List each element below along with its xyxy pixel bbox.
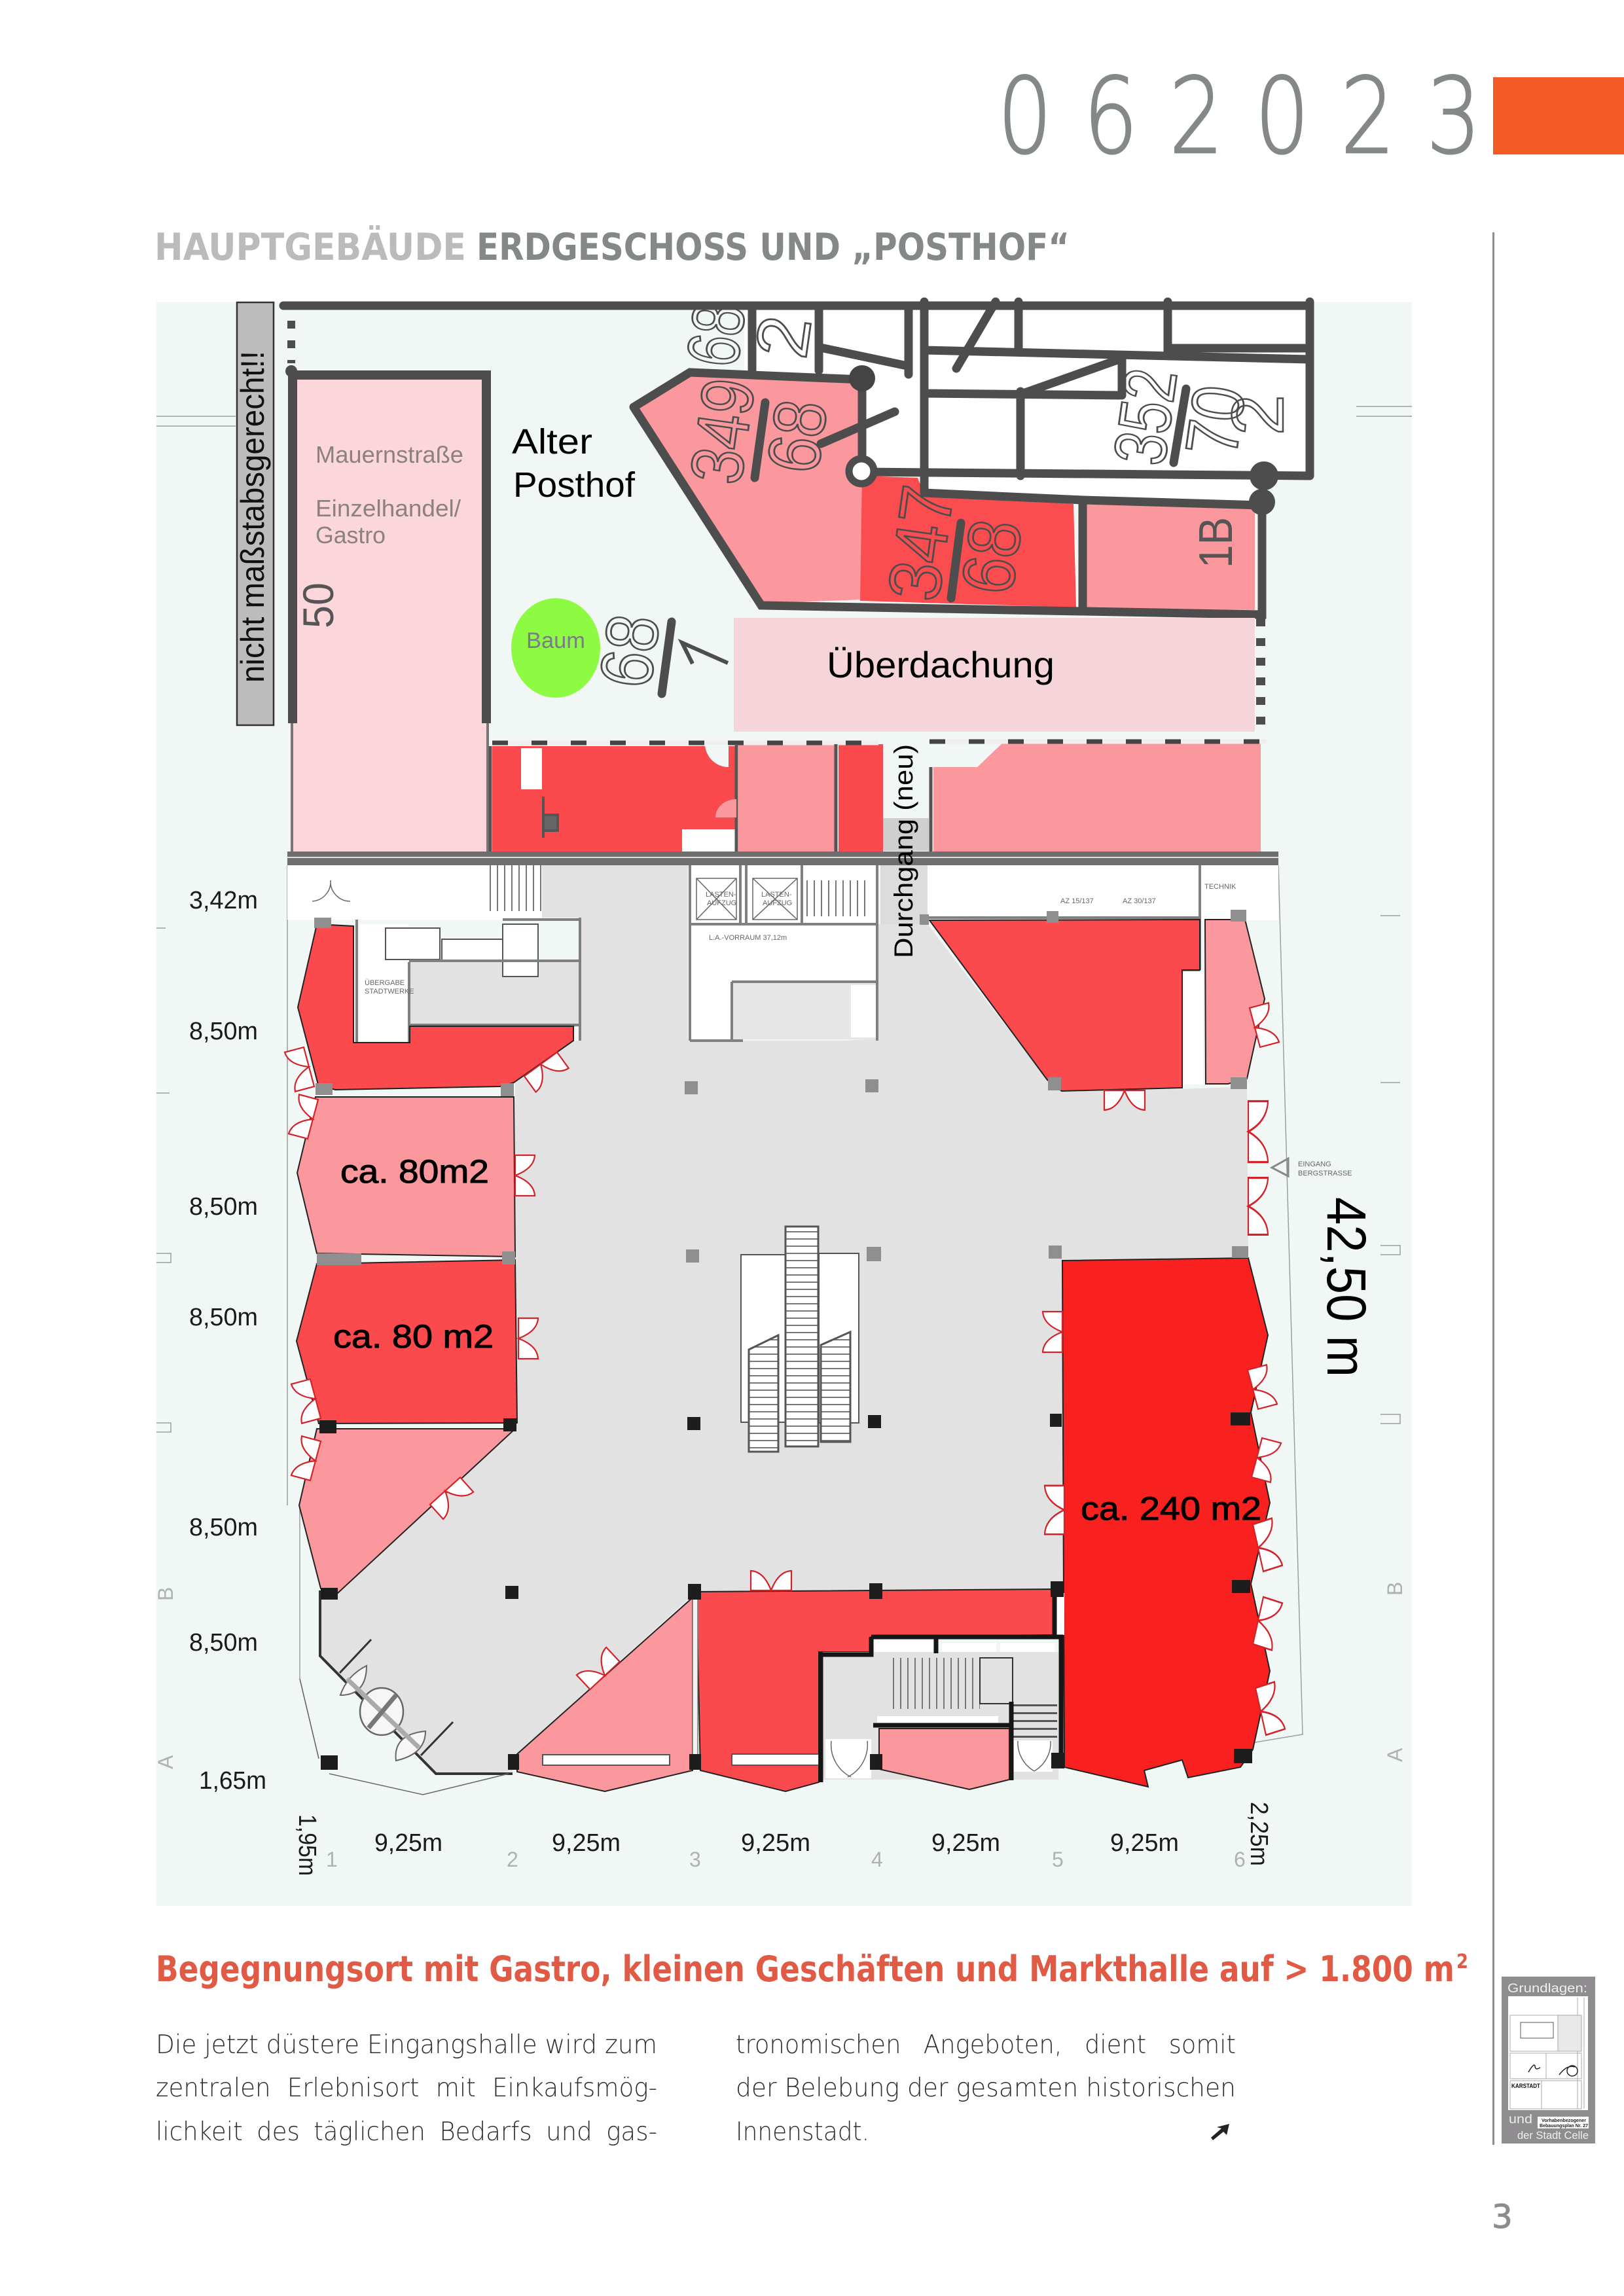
parcel number 1B: 1B — [1190, 517, 1242, 568]
grid marks and axis letters: B — [1383, 1582, 1407, 1596]
grid marks and axis letters: 1 — [326, 1848, 338, 1871]
header: issue number 06 2023: 2 — [1169, 55, 1223, 177]
shop: north-east red — [929, 920, 1200, 1091]
dimensions: left side heights — [189, 887, 266, 1795]
shop: about 80 square metres, red — [297, 1260, 517, 1424]
parcel number 347/68: 68 — [946, 514, 1038, 599]
lift core — [690, 865, 877, 1041]
body text left column: Die jetzt düstere Eingangshalle wird zum — [156, 2030, 657, 2060]
shop: east small pink — [1205, 920, 1265, 1084]
page title: ERDGESCHOSS UND „POSTHOF“ — [477, 226, 1070, 269]
body text right column: tronomischen Angeboten, dient somit — [736, 2030, 1236, 2060]
shop: south-west pink — [299, 1429, 515, 1593]
canopy: Überdachung: Überdachung — [827, 644, 1055, 685]
south stair core — [821, 1593, 1064, 1789]
parcel number 347/68: 347 — [873, 480, 969, 605]
lift core: LASTEN- — [706, 891, 736, 899]
north service corridor: TECHNIK — [1204, 883, 1236, 891]
lift core: L.A.-VORRAUM 37,12m — [709, 934, 787, 942]
page number: 3 — [1492, 2198, 1513, 2236]
dimensions: left side heights: 8,50m — [189, 1193, 258, 1221]
dimensions: left side heights: 8,50m — [189, 1514, 258, 1541]
lift core: AUFZUG — [763, 899, 792, 907]
body text right column: der Belebung der gesamten historischen — [736, 2073, 1236, 2103]
shop: north-west — [298, 924, 573, 1090]
grid marks and axis letters: 2 — [507, 1848, 518, 1871]
south-west entrance with revolving door — [300, 1590, 513, 1795]
shop: about 240 square metres: ca. 240 m2 — [1081, 1490, 1261, 1527]
shop: about 240 square metres — [1062, 1258, 1270, 1787]
cadastre: neighbouring parcels — [283, 298, 1310, 694]
header: issue number 06 2023: 2 — [1341, 55, 1395, 177]
dimensions: bottom widths: 9,25m — [741, 1829, 810, 1857]
dimensions: bottom widths — [293, 1802, 1272, 1876]
label: Alter Posthof: Alter — [512, 422, 592, 461]
grid marks and axis letters: 3 — [689, 1848, 701, 1871]
dimensions: bottom widths: 2,25m — [1245, 1802, 1272, 1866]
dimension: total depth 42,50 m: 42,50 m — [1316, 1197, 1377, 1377]
thumbnail: Grundlagen document: Grundlagen: — [1507, 1982, 1587, 1996]
vertical rule — [1492, 232, 1494, 2145]
main hall floor — [287, 852, 1278, 1774]
north service corridor: AZ 15/137 — [1060, 897, 1094, 905]
heading: meeting place: 2 — [1456, 1950, 1468, 1973]
structural columns — [314, 910, 1252, 1770]
north service corridor: AZ 30/137 — [1123, 897, 1156, 905]
unit: Mauernstrasse retail and gastro — [285, 321, 488, 852]
grid marks and axis letters: 6 — [1234, 1848, 1246, 1871]
grid marks and axis letters — [154, 406, 1412, 1871]
page title: HAUPTGEBÄUDE — [154, 225, 466, 269]
shop: about 80 square metres, pink — [297, 1097, 515, 1257]
thumbnail: Grundlagen document — [1502, 1977, 1595, 2144]
label: Alter Posthof: Posthof — [513, 465, 636, 505]
parcel number 349/68: 349 — [675, 374, 770, 489]
row of rooms along courtyard — [490, 741, 1267, 852]
header: issue number 06 2023: 6 — [1083, 55, 1138, 177]
unit: Mauernstrasse retail and gastro: Gastro — [316, 522, 386, 548]
thumbnail: Grundlagen document: Bebauungsplan Nr. 27 — [1540, 2123, 1588, 2128]
unit: Mauernstrasse retail and gastro: Mauernstraße — [316, 441, 463, 468]
dimensions: left side heights: 3,42m — [189, 887, 258, 914]
grid marks and axis letters: 5 — [1052, 1848, 1064, 1871]
unit: Mauernstrasse retail and gastro: 50 — [294, 583, 342, 628]
parcel number 349/68: 68 — [671, 298, 761, 371]
main wall band — [287, 852, 1278, 865]
icon: tree — [511, 598, 600, 698]
parcel number 68/1: 68 — [584, 609, 675, 692]
shop: about 80 square metres, pink: ca. 80m2 — [340, 1153, 489, 1190]
icon: continue arrow — [1211, 2124, 1229, 2140]
label: Durchgang neu: Durchgang (neu) — [890, 744, 918, 958]
body text left column — [156, 2030, 657, 2147]
lift core: LASTEN- — [761, 891, 792, 899]
header: issue number 06 2023: 0 — [1255, 55, 1309, 177]
dimensions: left side heights: 8,50m — [189, 1018, 258, 1045]
lift core: AUFZUG — [707, 899, 736, 907]
grid marks and axis letters: A — [1383, 1748, 1407, 1762]
dimensions: left side heights: 1,65m — [199, 1767, 266, 1795]
north service corridor — [312, 865, 1236, 970]
body text left column: zentralen Erlebnisort mit Einkaufsmög- — [156, 2073, 657, 2103]
west annex rooms: ÜBERGABE — [365, 979, 405, 987]
page title — [154, 225, 1070, 269]
canopy: Überdachung — [734, 618, 1261, 733]
grid marks and axis letters: 4 — [871, 1848, 883, 1871]
parcel number 347/68 — [873, 480, 1038, 605]
thumbnail: Grundlagen document: und — [1509, 2113, 1532, 2126]
body text left column: lichkeit des täglichen Bedarfs und gas- — [156, 2117, 657, 2147]
parcel number 349/68: 68 — [751, 395, 842, 478]
panel: floor plan — [154, 298, 1412, 1906]
door swings — [285, 1003, 1285, 1735]
grid marks and axis letters: A — [154, 1755, 177, 1769]
parcel number 352/70/2 — [1098, 364, 1299, 470]
label: not to scale: nicht maßstabsgerecht!! — [234, 351, 271, 683]
parcel number 349/68: 2 — [740, 311, 827, 363]
west annex rooms — [357, 918, 580, 1044]
orange header block — [1493, 77, 1624, 154]
icon: tree: Baum — [526, 628, 585, 653]
dimensions: bottom widths: 9,25m — [931, 1829, 1000, 1857]
parcel number 352/70/2: 2 — [1217, 395, 1299, 435]
entrance marker: BERGSTRASSE — [1298, 1170, 1352, 1177]
parcel number 352/70/2: 70 — [1170, 380, 1261, 461]
body text right column: Innenstadt. — [736, 2117, 869, 2147]
dimensions: left side heights: 8,50m — [189, 1304, 258, 1331]
thumbnail: Grundlagen document: KARSTADT — [1511, 2083, 1540, 2089]
west annex rooms: STADTWERKE — [365, 988, 414, 996]
parcel number 352/70/2: 352 — [1098, 364, 1193, 470]
body text right column — [736, 2030, 1236, 2147]
shop: south triangle pink — [517, 1598, 698, 1791]
header: issue number 06 2023: 0 — [998, 55, 1052, 177]
thumbnail: Grundlagen document: der Stadt Celle — [1517, 2129, 1589, 2142]
parcel number 68/1 — [584, 609, 728, 694]
dimensions: bottom widths: 9,25m — [552, 1829, 621, 1857]
entrance marker — [1272, 1158, 1352, 1177]
dimensions: left side heights: 8,50m — [189, 1629, 258, 1657]
entrance marker: EINGANG — [1298, 1160, 1331, 1168]
header: issue number 06 2023: 3 — [1426, 55, 1481, 177]
shop: about 80 square metres, red: ca. 80 m2 — [333, 1318, 494, 1355]
dimensions: bottom widths: 9,25m — [1110, 1829, 1179, 1857]
central escalators — [741, 1227, 859, 1452]
shop: south red — [696, 1589, 1055, 1791]
dimensions: bottom widths: 9,25m — [374, 1829, 442, 1857]
parcel number 349/68 — [671, 298, 842, 489]
label: Alter Posthof — [512, 422, 636, 505]
grid marks and axis letters: B — [154, 1587, 177, 1601]
unit: Mauernstrasse retail and gastro: Einzelhandel/ — [316, 495, 461, 522]
dimensions: bottom widths: 1,95m — [293, 1814, 321, 1876]
thumbnail: Grundlagen document: Vorhabenbezogener — [1542, 2117, 1586, 2123]
header: issue number 06 2023 — [998, 55, 1481, 177]
